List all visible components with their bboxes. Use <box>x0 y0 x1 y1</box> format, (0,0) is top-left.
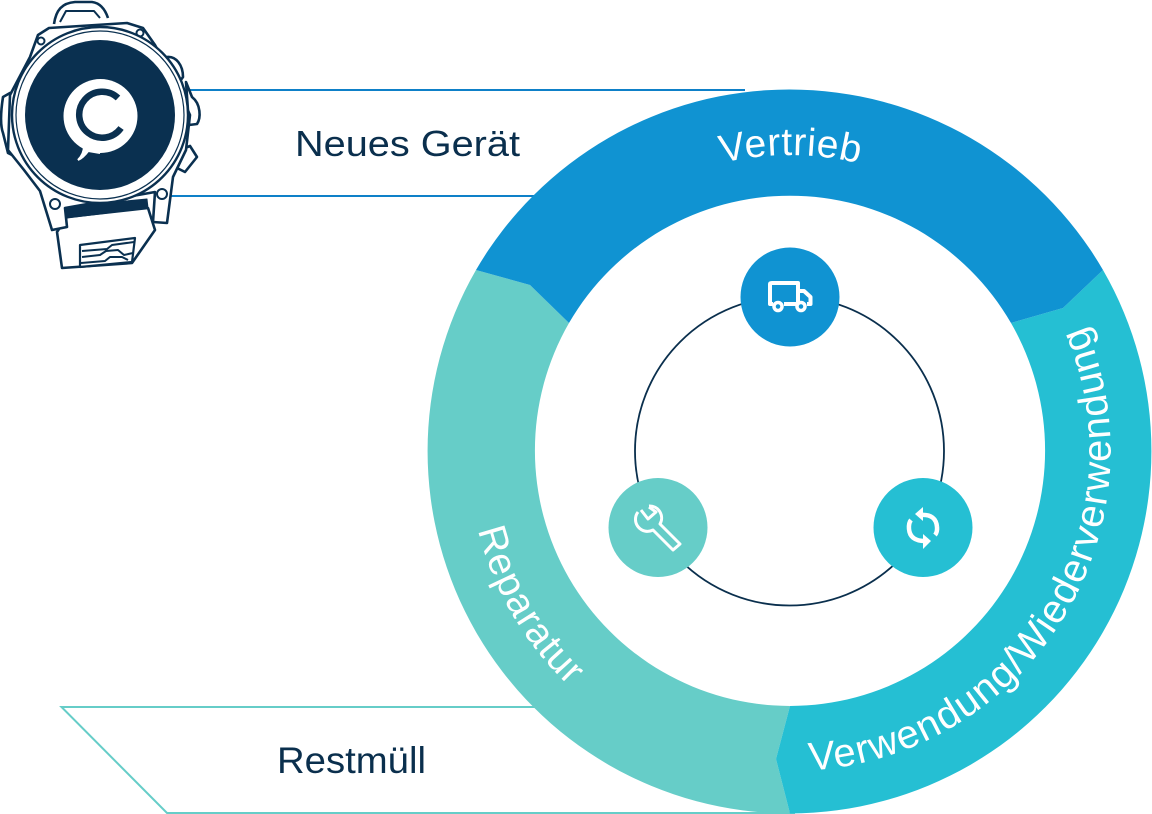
label: Reparatur: Reparatur <box>478 526 583 682</box>
watch case <box>1 2 200 230</box>
lug screws <box>38 30 167 209</box>
label: Restmüll: Restmüll <box>277 740 426 781</box>
segment: Vertrieb <box>476 89 1103 323</box>
logo <box>64 79 138 160</box>
segment: Verwendung/Wiederverwendung <box>776 270 1151 814</box>
icon node: truck <box>740 248 840 346</box>
bezel <box>12 27 188 203</box>
segment: Reparatur <box>428 270 790 814</box>
label: Neues Gerät: Neues Gerät <box>295 123 520 164</box>
watch strap <box>57 199 155 268</box>
panel: Restmüll band <box>62 707 795 813</box>
panel: neues Gerät band <box>170 90 745 196</box>
icon node: refresh <box>874 478 972 577</box>
watch face <box>25 40 175 190</box>
label: Vertrieb: Vertrieb <box>717 128 860 162</box>
cycle ring <box>428 90 1152 814</box>
icon: smartwatch with logo <box>1 2 200 268</box>
icon node: wrench <box>608 478 708 577</box>
label: Verwendung/Wiederverwendung: Verwendung/Wiederverwendung <box>807 327 1111 770</box>
inner circle <box>635 296 944 606</box>
